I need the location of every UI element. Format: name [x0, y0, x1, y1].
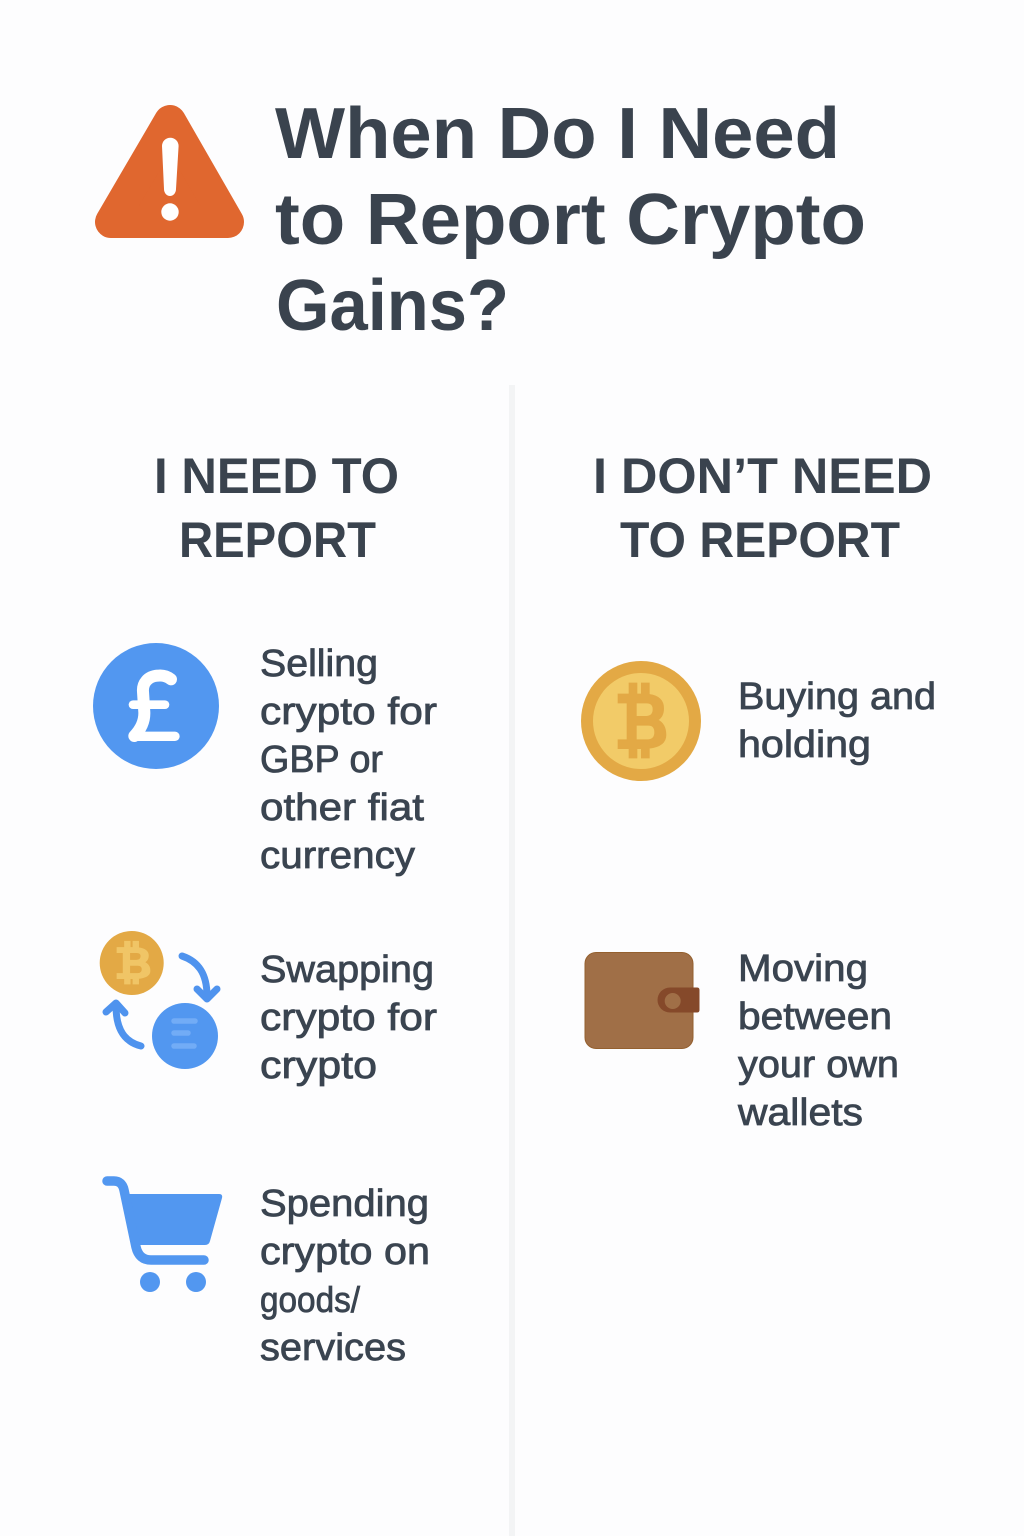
icon: shopping cart — [107, 1181, 222, 1292]
heading: I don't need to report — [593, 448, 932, 568]
title: When Do I Need — [275, 94, 840, 174]
text: buying and holding — [738, 676, 936, 766]
icon: swap coins — [100, 931, 218, 1069]
item: swapping crypto — [100, 931, 437, 1087]
header: warning icon and title — [111, 94, 866, 346]
text: spending crypto: services — [260, 1327, 406, 1369]
text: moving between wallets: your own — [738, 1044, 899, 1086]
text: swapping crypto: crypto — [260, 1045, 377, 1087]
text: selling crypto: crypto for — [260, 691, 437, 733]
text: selling crypto: currency — [260, 835, 415, 877]
text: swapping crypto: crypto for — [260, 997, 437, 1039]
item: spending crypto — [107, 1181, 430, 1369]
text: selling crypto: GBP or — [260, 739, 383, 781]
icon: wallet — [585, 952, 700, 1048]
text: selling crypto: Selling — [260, 643, 378, 685]
heading: I don't need to report: I DON’T NEED — [593, 448, 932, 504]
text: moving between wallets — [737, 948, 899, 1134]
text: swapping crypto — [260, 949, 437, 1087]
item: moving between wallets — [585, 948, 899, 1134]
heading: I need to report: I NEED TO — [154, 448, 399, 504]
icon: bitcoin coin — [581, 661, 701, 781]
title: Gains? — [276, 266, 509, 346]
text: spending crypto: goods/ — [260, 1279, 360, 1320]
title — [275, 94, 866, 346]
text: spending crypto: crypto on — [260, 1231, 430, 1273]
panel: I need to report — [93, 448, 437, 1369]
heading: I don't need to report: TO REPORT — [620, 512, 900, 568]
text: moving between wallets: wallets — [737, 1092, 863, 1134]
text: moving between wallets: Moving — [738, 948, 868, 990]
text: buying and holding: Buying and — [738, 676, 936, 718]
text: buying and holding: holding — [738, 724, 871, 766]
text: spending crypto: Spending — [260, 1183, 429, 1225]
title: to Report Crypto — [275, 180, 866, 260]
text: moving between wallets: between — [738, 996, 892, 1038]
text: selling crypto: other fiat — [260, 787, 424, 829]
item: buying and holding — [581, 661, 936, 781]
item: selling crypto — [93, 643, 437, 877]
panel: I don't need to report — [581, 448, 936, 1134]
heading: I need to report — [154, 448, 399, 568]
icon: pound coin — [93, 643, 219, 769]
icon: warning triangle — [111, 121, 228, 222]
text: spending crypto — [260, 1183, 430, 1369]
text: swapping crypto: Swapping — [260, 949, 434, 991]
heading: I need to report: REPORT — [179, 512, 376, 568]
text: selling crypto — [260, 643, 437, 877]
